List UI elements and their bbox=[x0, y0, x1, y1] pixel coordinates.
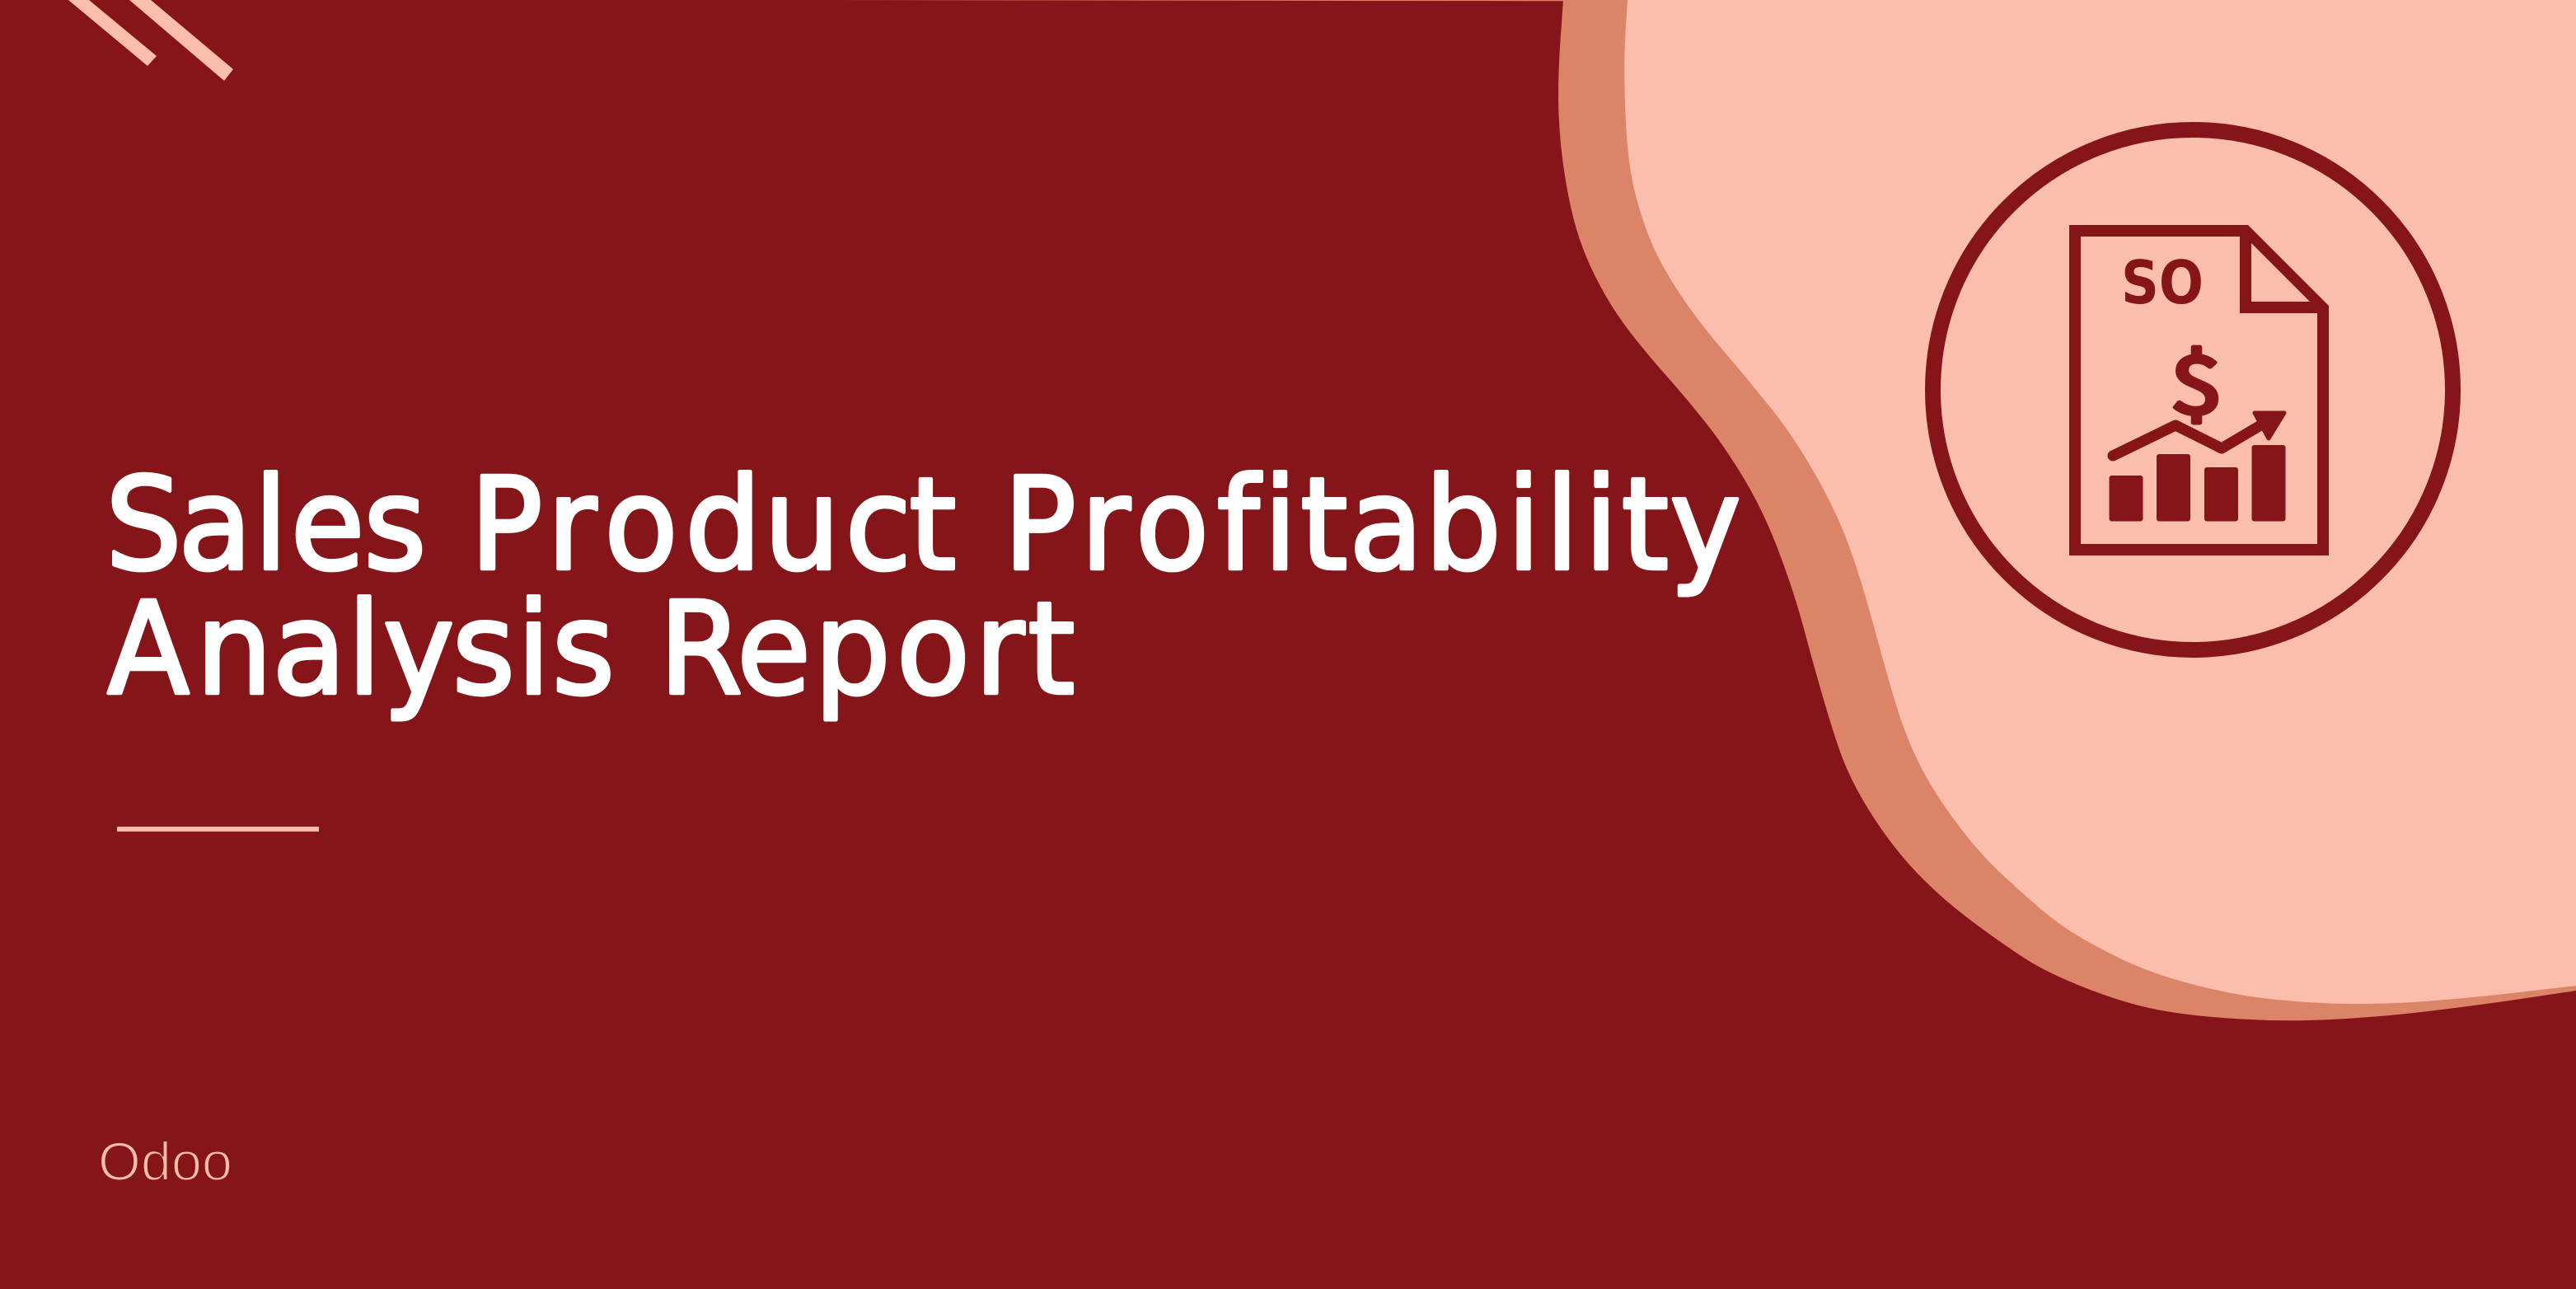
icon: bar chart bbox=[2110, 445, 2286, 521]
top edge sliver bbox=[808, 0, 1563, 1]
blob: inner light salmon shape bbox=[1624, 0, 2576, 1004]
title line 2: Analysis Report bbox=[107, 575, 1075, 724]
decorative diagonal stripes bbox=[68, 0, 233, 81]
icon: dollar sign: $ bbox=[2170, 321, 2222, 437]
divider line bbox=[117, 827, 319, 832]
icon: circle ring bbox=[1933, 130, 2452, 649]
icon: document with folded corner bbox=[2069, 225, 2329, 555]
icon: trend line arrow bbox=[2113, 413, 2284, 456]
blob: outer darker salmon shape bbox=[1558, 0, 2576, 1020]
title line 1: Sales Product Profitability bbox=[105, 451, 1741, 599]
icon: SO label: SO bbox=[2121, 248, 2204, 317]
brand label: Odoo bbox=[98, 1131, 232, 1192]
icon: report in circle bbox=[1933, 130, 2452, 649]
title bbox=[105, 451, 1741, 724]
